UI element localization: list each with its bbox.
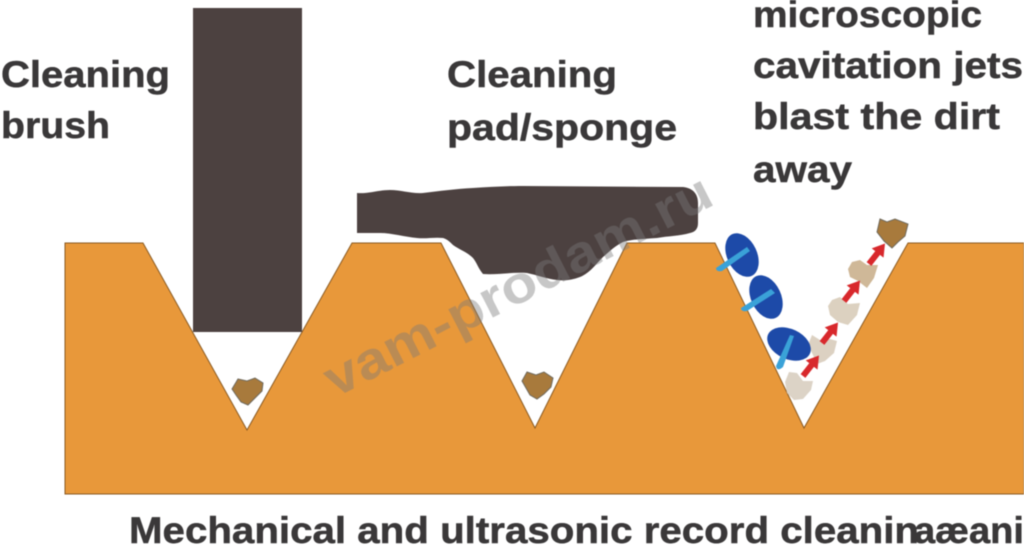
jet 2 [743,270,789,324]
jet 3 [762,321,816,367]
dirt particle: second groove [522,372,553,399]
label: cleaning pad/sponge [447,54,677,148]
label: cleaning pad/sponge: Cleaning [447,54,617,95]
dirt particle: first groove [232,378,263,405]
caption: Mechanical and ultrasonic record cleanin [129,510,919,551]
label: cleaning brush [1,54,170,146]
grooved record surface [65,243,1024,494]
faded particle 1 [785,372,813,400]
label: cavitation jets: blast the dirt [753,96,1000,137]
label: cleaning brush: brush [1,105,110,146]
faded particle 3 [828,297,860,325]
cleaning brush [193,8,302,332]
faded particle 2 [808,335,837,364]
red arrows showing dirt movement [797,239,891,381]
label: cavitation jets [753,0,1023,190]
cavitation jets [716,228,816,369]
caption: aæani [914,510,1024,551]
faded particle 4 [848,260,878,288]
label: cleaning pad/sponge: pad/sponge [447,107,677,148]
label: cavitation jets: cavitation jets [753,45,1023,86]
dirt particles lifted by cavitation [785,219,908,400]
label: cavitation jets: away [753,149,852,190]
brown particle at exit [877,219,908,248]
cleaning pad/sponge [357,186,698,280]
jet 1 [719,228,765,282]
label: cleaning brush: Cleaning [1,54,170,95]
watermark: vam-prodam.ru [314,163,722,409]
